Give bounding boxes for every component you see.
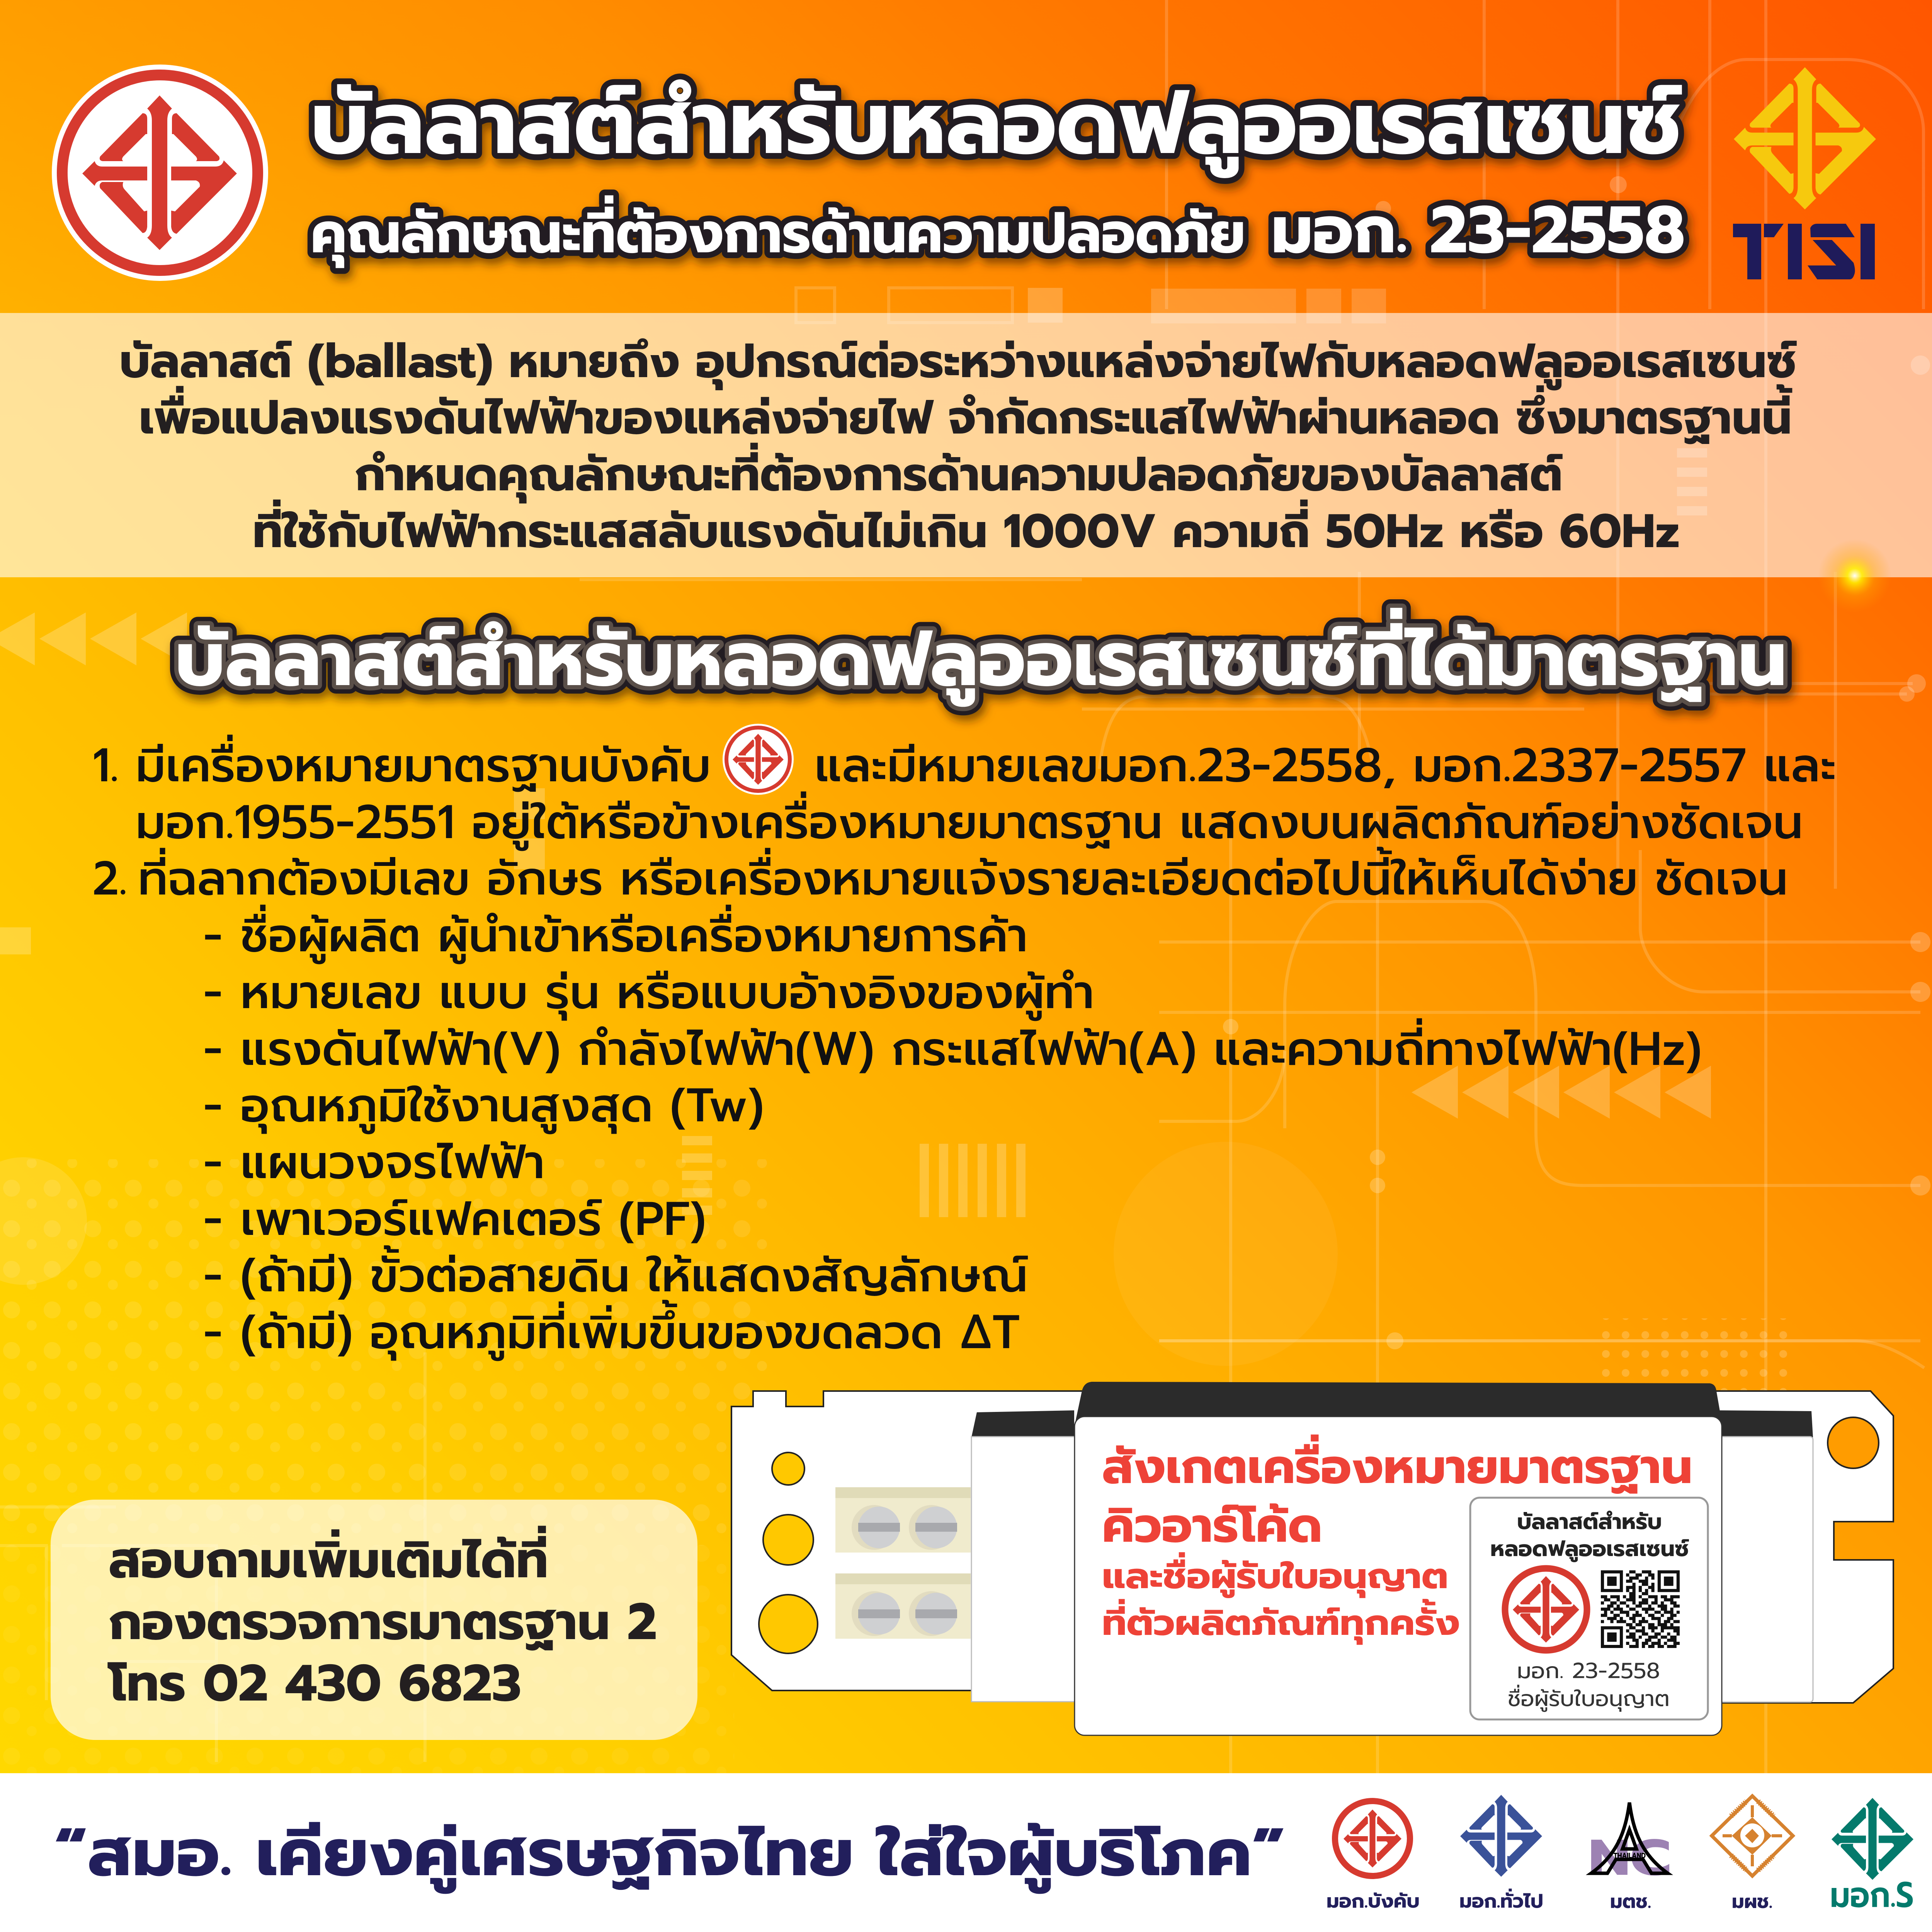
label detail list: เพาเวอร์แฟคเตอร์ (PF) <box>240 1184 706 1255</box>
intro paragraph: บัลลาสต์ (ballast) หมายถึง อุปกรณ์ต่อระหว่างแหล่งจ่ายไฟกับหลอดฟลูออเรสเซนซ์ <box>119 326 1797 397</box>
footer logo: general mark: มอก.ทั่วไป <box>1459 1887 1543 1916</box>
red notice text: สังเกตเครื่องหมายมาตรฐาน <box>1102 1431 1692 1503</box>
requirement 1: 1. มีเครื่องหมายมาตรฐานบังคับ <box>92 730 711 801</box>
QR code <box>1601 1572 1680 1646</box>
requirement 1 <box>92 724 1836 858</box>
footer band <box>0 1773 1932 1932</box>
requirement 2: ที่ฉลากต้องมีเลข อักษร หรือเครื่องหมายแจ้งรายละเอียดต่อไปนี้ให้เห็นได้ง่าย ชัดเจน <box>138 844 1788 915</box>
label face <box>1075 1417 1722 1735</box>
label detail list: แรงดันไฟฟ้า(V) กำลังไฟฟ้า(W) กระแสไฟฟ้า(A) และความถี่ทางไฟฟ้า(Hz) <box>240 1014 1702 1085</box>
intro paragraph: เพื่อแปลงแรงดันไฟฟ้าของแหล่งจ่ายไฟ จำกัดกระแสไฟฟ้าผ่านหลอด ซึ่งมาตรฐานนี้ <box>139 383 1793 454</box>
requirement 1: และมีหมายเลขมอก.23-2558, มอก.2337-2557 และ <box>815 730 1836 801</box>
decorative arrows right <box>1412 1066 1711 1119</box>
QR info card: ชื่อผู้รับใบอนุญาต <box>1508 1682 1670 1715</box>
label detail list: - <box>203 900 223 971</box>
requirement 1: มอก.1955-2551 อยู่ใต้หรือข้างเครื่องหมายมาตรฐาน แสดงบนผลิตภัณฑ์อย่างชัดเจน <box>136 787 1803 858</box>
QR info card: หลอดฟลูออเรสเซนซ์ <box>1490 1532 1689 1565</box>
label detail list: อุณหภูมิใช้งานสูงสุด (Tw) <box>240 1070 764 1141</box>
terminal block lower <box>835 1573 971 1639</box>
contact panel: กองตรวจการมาตรฐาน 2 <box>109 1583 657 1661</box>
plate holes <box>759 1417 1879 1653</box>
label detail list: หมายเลข แบบ รุ่น หรือแบบอ้างอิงของผู้ทำ <box>240 957 1094 1028</box>
intro paragraph: กำหนดคุณลักษณะที่ต้องการด้านความปลอดภัยของบัลลาสต์ <box>355 439 1563 510</box>
intro band <box>0 313 1932 577</box>
footer logo: NAC tower: THAILAND <box>1614 1850 1646 1862</box>
QR info card: มอก. 23-2558 <box>1517 1655 1660 1687</box>
ballast body sides <box>971 1410 1813 1702</box>
red notice text: และชื่อผู้รับใบอนุญาต <box>1102 1549 1448 1603</box>
footer logo: community mark: มผช. <box>1732 1887 1772 1917</box>
footer logo: NAC tower <box>1588 1803 1671 1917</box>
section heading: บัลลาสต์สำหรับหลอดฟลูออเรสเซนซ์ที่ได้มาตรฐาน <box>175 602 1787 718</box>
subtitle <box>311 181 1685 280</box>
intro paragraph <box>119 326 1797 567</box>
label detail list: - <box>203 957 223 1028</box>
slogan: “สมอ. เคียงคู่เศรษฐกิจไทย ใส่ใจผู้บริโภค” <box>54 1804 1285 1903</box>
subtitle: คุณลักษณะที่ต้องการด้านความปลอดภัย <box>311 191 1245 276</box>
requirement 2: 2. <box>92 844 127 915</box>
footer logo: community mark <box>1712 1796 1793 1917</box>
footer logo: S mark <box>1830 1798 1914 1922</box>
section heading: บัลลาสต์สำหรับหลอดฟลูออเรสเซนซ์ที่ได้มาตรฐาน <box>175 602 1787 718</box>
footer logo: S mark: มอก.S <box>1830 1868 1914 1922</box>
footer logo: NAC tower: มตช. <box>1610 1887 1651 1917</box>
mounting plate <box>731 1391 1893 1703</box>
title: บัลลาสต์สำหรับหลอดฟลูออเรสเซนซ์ <box>311 57 1682 190</box>
label detail list: - <box>203 1240 223 1311</box>
TISI yellow mark <box>1734 67 1876 209</box>
footer logo: NAC tower: NC <box>1588 1820 1671 1896</box>
label detail list: - <box>203 1184 223 1255</box>
ballast top cap <box>1075 1382 1722 1422</box>
red notice text: ที่ตัวผลิตภัณฑ์ทุกครั้ง <box>1102 1596 1460 1650</box>
red notice text <box>1102 1431 1692 1650</box>
red notice text: คิวอาร์โค้ด <box>1102 1490 1322 1562</box>
label detail list: - <box>203 1127 223 1198</box>
footer logo: compulsory mark <box>1327 1801 1420 1916</box>
label detail list: แผนวงจรไฟฟ้า <box>240 1127 545 1198</box>
subtitle: มอก. 23-2558 <box>1271 181 1685 280</box>
footer logo: general mark <box>1459 1795 1543 1916</box>
footer logo: compulsory mark: มอก.บังคับ <box>1327 1887 1420 1916</box>
QR info card: บัลลาสต์สำหรับ <box>1517 1505 1662 1538</box>
QR info card <box>1470 1498 1708 1719</box>
main seal logo <box>52 65 268 281</box>
ballast illustration <box>731 1382 1893 1735</box>
contact panel <box>51 1500 697 1740</box>
terminal block upper <box>835 1487 971 1553</box>
intro paragraph: ที่ใช้กับไฟฟ้ากระแสสลับแรงดันไม่เกิน 1000V ความถี่ 50Hz หรือ 60Hz <box>253 496 1680 567</box>
decorative arrows left <box>0 612 187 665</box>
TISI wordmark <box>1733 224 1875 279</box>
contact panel: โทร 02 430 6823 <box>107 1645 521 1722</box>
contact panel: สอบถามเพิ่มเติมได้ที่ <box>109 1522 548 1599</box>
label detail list: ชื่อผู้ผลิต ผู้นำเข้าหรือเครื่องหมายการค้า <box>240 900 1028 971</box>
label detail list: - <box>203 1070 223 1141</box>
lens flare <box>1818 539 1891 612</box>
label detail list <box>203 900 1702 1368</box>
label detail list: (ถ้ามี) อุณหภูมิที่เพิ่มขึ้นของขดลวด ΔT <box>240 1297 1020 1368</box>
label detail list: (ถ้ามี) ขั้วต่อสายดิน ให้แสดงสัญลักษณ์ <box>240 1240 1028 1311</box>
label detail list: - <box>203 1014 223 1085</box>
label detail list: - <box>203 1297 223 1368</box>
